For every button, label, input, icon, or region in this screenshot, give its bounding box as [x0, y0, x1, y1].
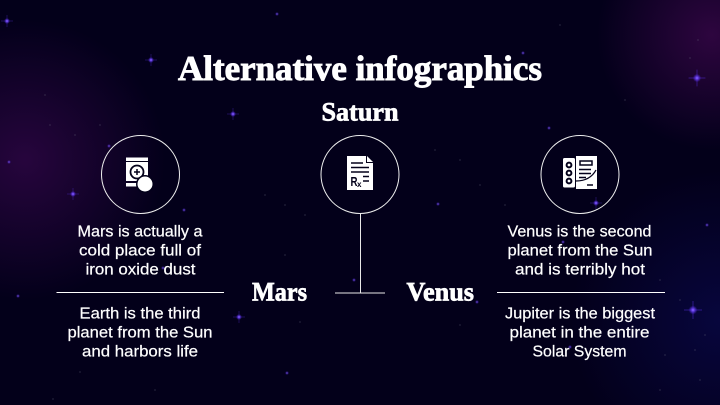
- icon: receipt with plus and badge: [102, 136, 180, 214]
- text: Mars description: [78, 224, 203, 278]
- text: Venus description: and is terribly hot: [515, 262, 646, 278]
- text: Venus description: [508, 224, 652, 278]
- icon: prescription document: R: [350, 174, 358, 189]
- icon: server tower: [541, 136, 619, 214]
- divider: right: [497, 292, 665, 294]
- heading: Saturn: Saturn: [322, 98, 399, 126]
- icon: prescription document: [321, 136, 399, 214]
- heading: Mars: Mars: [252, 278, 307, 306]
- text: Earth description: planet from the Sun: [68, 324, 212, 342]
- text: Mars description: Mars is actually a: [78, 224, 203, 240]
- icon: prescription document: x: [357, 180, 362, 189]
- text: Jupiter description: Solar System: [532, 344, 626, 360]
- text: Venus description: planet from the Sun: [508, 242, 652, 260]
- text: Venus description: Venus is the second: [508, 224, 652, 240]
- title: Alternative infographics: [178, 49, 542, 88]
- text: Earth description: Earth is the third: [80, 306, 200, 322]
- text: Jupiter description: [505, 306, 656, 360]
- text: Earth description: [68, 306, 212, 360]
- text: Jupiter description: planet in the entire: [510, 324, 650, 342]
- connector lines: [335, 213, 385, 293]
- divider: left: [56, 292, 224, 294]
- text: Mars description: iron oxide dust: [86, 262, 196, 278]
- heading: Venus: Venus: [406, 278, 474, 306]
- text: Earth description: and harbors life: [82, 344, 198, 360]
- text: Jupiter description: Jupiter is the biggest: [505, 306, 656, 322]
- text: Mars description: cold place full of: [79, 242, 202, 260]
